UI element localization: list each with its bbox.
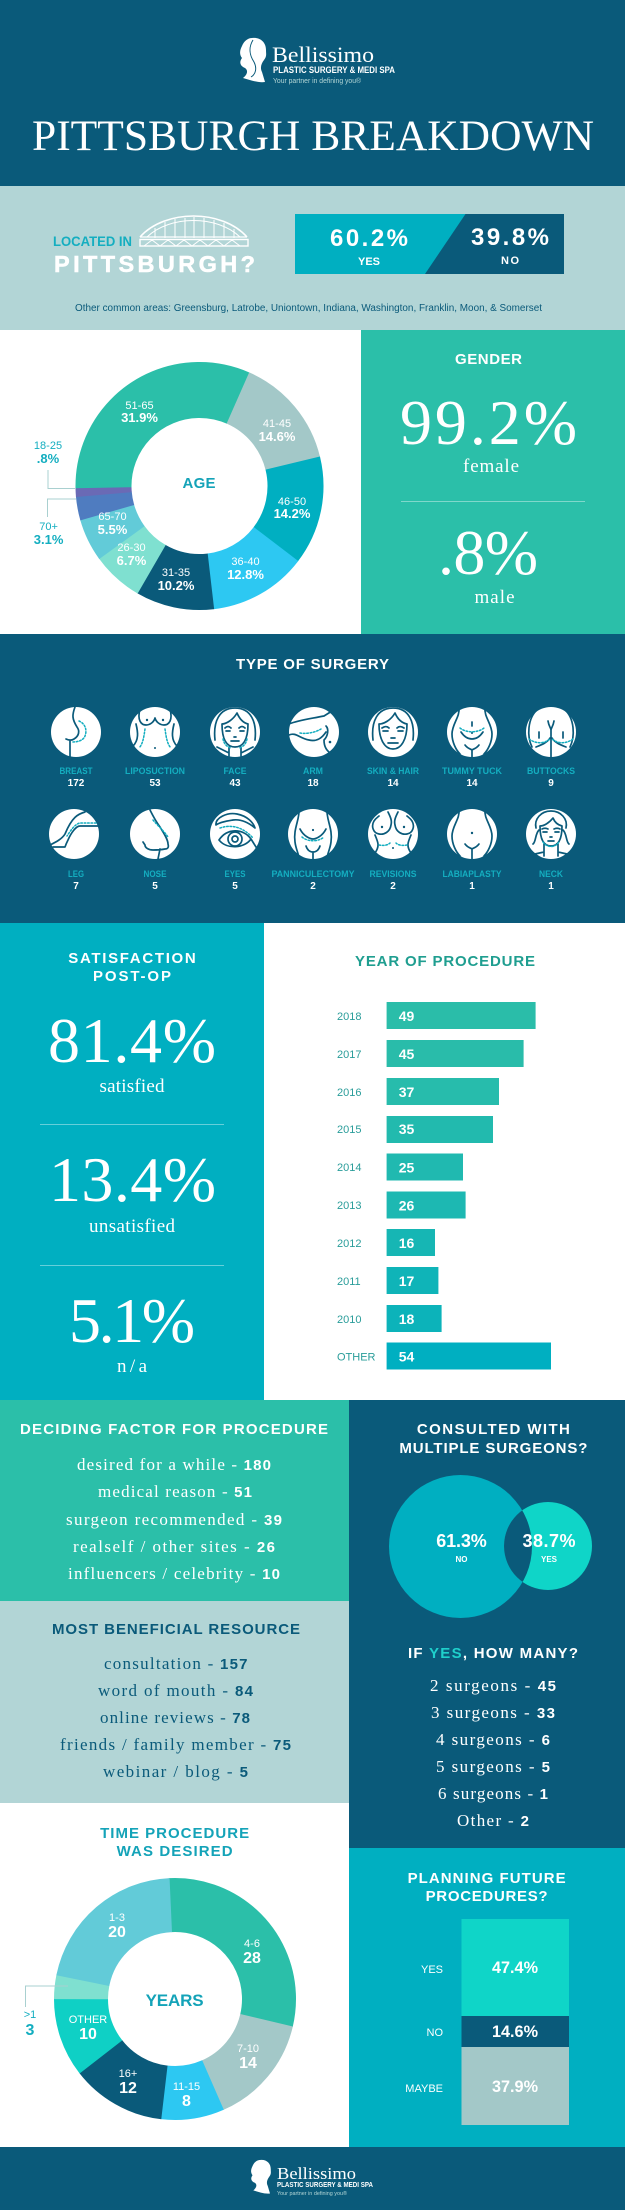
- bar: 2015: 2015: [337, 1124, 361, 1136]
- label: 4-6: [243, 1938, 261, 1967]
- list: surgeon counts: 6 surgeons - 1: [438, 1784, 548, 1803]
- icon: revisions: [368, 809, 418, 859]
- label: neck: [539, 869, 563, 892]
- logo: Bellissimo: Bellissimo: [272, 42, 374, 67]
- label: arm: 18: [307, 778, 319, 789]
- bar: other: 54: [399, 1348, 414, 1364]
- label: 26-30: [117, 542, 147, 568]
- label: 4-6: 28: [243, 1950, 261, 1967]
- bar: 2013: 2013: [337, 1200, 361, 1212]
- list: deciding factors: influencers / celebrity - 10: [68, 1564, 280, 1583]
- panel: age: [0, 330, 361, 634]
- stat: yes: 60.2%: [330, 225, 408, 252]
- bar: 2017: 2017: [337, 1049, 361, 1061]
- bar: 2017: [337, 1040, 524, 1067]
- stat: yes: YES: [358, 256, 380, 268]
- label: other: [69, 2014, 107, 2043]
- bar: 2015: [337, 1116, 493, 1143]
- bar: 2018: 2018: [337, 1011, 361, 1023]
- heading: gender: GENDER: [455, 351, 522, 368]
- bar: 2018: [337, 1002, 536, 1029]
- stat: unsatisfied: unsatisfied: [89, 1216, 176, 1237]
- panel: type of surgery: [0, 634, 625, 923]
- bar chart: years: [337, 1002, 551, 1370]
- panel: header: [0, 0, 625, 186]
- panel: gender: [361, 330, 625, 634]
- logo: Bellissimo: PLASTIC SURGERY & MEDI SPA: [273, 65, 395, 75]
- stacked bar: maybe: MAYBE: [405, 2083, 443, 2095]
- label: 41-45: [259, 418, 296, 444]
- label: labiaplasty: [442, 869, 502, 892]
- label: 18-25: [34, 440, 62, 466]
- stacked bar: yes: YES: [421, 1964, 443, 1976]
- label: eyes: EYES: [224, 869, 246, 880]
- heading: consulted: CONSULTED WITH: [417, 1421, 570, 1438]
- label: 26-30: 26-30: [117, 542, 146, 554]
- label: 7-10: 7-10: [237, 2043, 259, 2055]
- label: leg: LEG: [68, 869, 84, 880]
- bar: 2013: 26: [399, 1198, 414, 1214]
- stat: female: female: [463, 456, 519, 477]
- label: panniculectomy: [272, 869, 355, 892]
- label: leg: 7: [73, 881, 79, 892]
- list: resources: online reviews - 78: [100, 1708, 250, 1727]
- label: revisions: REVISIONS: [370, 869, 416, 880]
- list: resources: friends / family member - 75: [60, 1735, 291, 1754]
- chart: venn: YES: [541, 1555, 558, 1564]
- chart: venn: 61.3%: [436, 1531, 487, 1551]
- label: face: FACE: [224, 766, 246, 777]
- icon: breast: [51, 707, 101, 757]
- label: labiaplasty: LABIAPLASTY: [442, 869, 502, 880]
- label: under 1: [24, 2009, 36, 2039]
- bar: 2010: [337, 1305, 442, 1332]
- chart: venn: NO: [456, 1555, 468, 1564]
- bar: other: [337, 1342, 551, 1370]
- label: revisions: [370, 869, 416, 892]
- label: 4-6: 4-6: [244, 1938, 260, 1950]
- label: 65-70: [98, 511, 128, 537]
- stat: n/a: 5.1%: [69, 1285, 195, 1356]
- label: skin and hair: [367, 766, 419, 789]
- stat: no: 39.8%: [471, 224, 549, 251]
- heading: consulted: MULTIPLE SURGEONS?: [399, 1440, 587, 1457]
- heading: time procedure was desired: [100, 1825, 249, 1860]
- panel: deciding factor: [0, 1400, 349, 1601]
- label: 18-25: .8%: [37, 451, 60, 466]
- bar: 2011: [337, 1267, 438, 1294]
- stat: no: NO: [501, 255, 519, 267]
- bar: 2011: 2011: [337, 1276, 361, 1288]
- label: 65-70: 5.5%: [98, 522, 128, 537]
- label: arm: ARM: [303, 766, 323, 777]
- label: 51-65: 51-65: [125, 400, 154, 412]
- label: 31-35: 31-35: [162, 567, 190, 579]
- label: panniculectomy: 2: [310, 881, 316, 892]
- label: 7-10: [237, 2043, 259, 2072]
- logo: Bellissimo: Your partner in defining you®: [273, 77, 362, 85]
- icon: nose: [130, 809, 180, 859]
- label: 11-15: 8: [182, 2093, 191, 2110]
- list: surgeon counts: Other - 2: [457, 1811, 529, 1830]
- label: breast: BREAST: [60, 766, 93, 777]
- label: 1-3: 20: [108, 1924, 126, 1941]
- stacked bar: yes: [421, 1919, 569, 2016]
- stat: male: .8%: [438, 517, 538, 588]
- stat: n/a: n/a: [117, 1356, 148, 1377]
- label: 11-15: [173, 2081, 200, 2110]
- list: surgeon counts: 3 surgeons - 33: [431, 1703, 555, 1722]
- label: 36-40: 36-40: [231, 556, 260, 568]
- heading: year of procedure: YEAR OF PROCEDURE: [355, 953, 535, 970]
- label: 26-30: 6.7%: [117, 553, 147, 568]
- list: resources: webinar / blog - 5: [103, 1762, 248, 1781]
- label: 16+: 16+: [119, 2068, 137, 2080]
- icon: leg: [49, 809, 99, 859]
- stat: female: 99.2%: [400, 387, 577, 458]
- icon: arm: [289, 707, 339, 757]
- stat: satisfied: satisfied: [100, 1076, 165, 1097]
- label: other: 10: [79, 2026, 97, 2043]
- bar: 2012: 2012: [337, 1238, 361, 1250]
- heading: if yes how many: IF YES, HOW MANY?: [408, 1645, 578, 1662]
- heading: satisfaction post-op: POST-OP: [93, 968, 171, 985]
- bar: 2013: [337, 1192, 466, 1218]
- icon: eyes: [210, 809, 260, 859]
- label: 51-65: 31.9%: [121, 410, 158, 425]
- label: 1-3: 1-3: [109, 1912, 125, 1924]
- label: breast: 172: [68, 778, 85, 789]
- stat: male: male: [474, 587, 514, 608]
- heading: planning future procedures: [408, 1870, 566, 1905]
- heading: planning future procedures: PROCEDURES?: [426, 1888, 548, 1905]
- bar: 2014: [337, 1154, 463, 1180]
- label: nose: 5: [152, 881, 158, 892]
- heading: time procedure was desired: TIME PROCEDURE: [100, 1825, 249, 1842]
- label: tummy tuck: TUMMY TUCK: [442, 766, 502, 777]
- label: 31-35: 10.2%: [158, 578, 195, 593]
- label: 46-50: 46-50: [278, 496, 306, 508]
- label: under 1: 3: [26, 2022, 35, 2039]
- icon: face: [210, 707, 260, 757]
- label: buttocks: BUTTOCKS: [527, 766, 575, 777]
- label: panniculectomy: PANNICULECTOMY: [272, 869, 355, 880]
- logo: footer Bellissimo: Your partner in defining you®: [277, 2190, 347, 2197]
- label: 18-25: 18-25: [34, 440, 62, 452]
- list: deciding factors: medical reason - 51: [98, 1482, 252, 1501]
- label: liposuction: [125, 766, 185, 789]
- bar: 2010: 18: [399, 1311, 414, 1327]
- list: surgeon counts: 2 surgeons - 45: [430, 1676, 556, 1695]
- bar: 2010: 2010: [337, 1314, 361, 1326]
- icon: buttocks: [526, 707, 576, 757]
- label: 70+: [34, 521, 64, 547]
- logo: footer Bellissimo: [251, 2160, 373, 2197]
- chart: venn: 38.7%: [522, 1531, 576, 1551]
- icon: liposuction: [130, 707, 180, 757]
- stacked bar: maybe: 37.9%: [492, 2077, 538, 2096]
- logo: Bellissimo: [240, 38, 395, 85]
- label: 70+: 70+: [39, 521, 58, 533]
- heading: satisfaction post-op: SATISFACTION: [68, 950, 196, 967]
- label: 51-65: [121, 400, 158, 425]
- heading: satisfaction post-op: [68, 950, 196, 985]
- heading: type of surgery: TYPE OF SURGERY: [236, 656, 389, 673]
- list: surgeon counts: 4 surgeons - 6: [436, 1730, 550, 1749]
- bar: 2011: 17: [399, 1273, 414, 1289]
- label: 11-15: 11-15: [173, 2081, 200, 2093]
- label: 41-45: 14.6%: [259, 429, 296, 444]
- icon: labiaplasty: [447, 809, 497, 859]
- label: face: 43: [229, 778, 241, 789]
- list: resources: [60, 1654, 291, 1781]
- label: 16+: [119, 2068, 137, 2097]
- stat: no: [471, 224, 549, 267]
- label: buttocks: 9: [548, 778, 554, 789]
- logo: footer Bellissimo: Bellissimo: [277, 2164, 356, 2183]
- label: tummy tuck: [442, 766, 502, 789]
- icon: panniculectomy: [288, 809, 338, 859]
- label: eyes: [224, 869, 246, 892]
- stacked bar: yes: 47.4%: [492, 1958, 538, 1977]
- icon: tummy tuck: [447, 707, 497, 757]
- list: surgeon counts: 5 surgeons - 5: [436, 1757, 550, 1776]
- bar: 2012: 16: [399, 1235, 414, 1251]
- label: revisions: 2: [390, 881, 396, 892]
- label: 65-70: 65-70: [98, 511, 127, 523]
- label: face: [224, 766, 246, 789]
- logo: footer Bellissimo: PLASTIC SURGERY & MEDI SPA: [277, 2182, 373, 2189]
- label: neck: 1: [548, 881, 554, 892]
- label: leg: [68, 869, 84, 892]
- icon: bridge: [140, 216, 248, 246]
- label: 36-40: [227, 556, 264, 582]
- list: resources: word of mouth - 84: [98, 1681, 254, 1700]
- bar: 2018: 49: [399, 1008, 414, 1024]
- list: deciding factors: surgeon recommended - 39: [66, 1510, 282, 1529]
- label: other: OTHER: [69, 2014, 107, 2026]
- panel: satisfaction post-op: [0, 923, 264, 1400]
- center label: years: YEARS: [146, 1991, 204, 2010]
- title: PITTSBURGH BREAKDOWN: [32, 113, 594, 160]
- center label: age: AGE: [182, 475, 216, 492]
- label: 36-40: 12.8%: [227, 567, 264, 582]
- list: resources: consultation - 157: [104, 1654, 248, 1673]
- stacked bar: no: NO: [426, 2027, 443, 2039]
- heading: planning future procedures: PLANNING FUTURE: [408, 1870, 566, 1887]
- bar: 2015: 35: [399, 1121, 414, 1137]
- bar: yes segment: [295, 214, 466, 274]
- icon: skin and hair: [368, 707, 418, 757]
- panel: year of procedure: [264, 923, 625, 1400]
- label: liposuction: 53: [149, 778, 161, 789]
- chart: years donut: [43, 1867, 307, 2131]
- chart: age donut: [65, 351, 334, 621]
- label: nose: [144, 869, 166, 892]
- heading: consulted: [399, 1421, 587, 1457]
- label: tummy tuck: 14: [466, 778, 478, 789]
- chart: venn: [389, 1475, 592, 1618]
- heading: located in: LOCATED IN: [53, 233, 132, 249]
- label: 41-45: 41-45: [263, 418, 291, 430]
- label: labiaplasty: 1: [469, 881, 475, 892]
- label: under 1: >1: [24, 2009, 36, 2021]
- list: deciding factors: desired for a while - 180: [77, 1455, 271, 1474]
- bar: other: OTHER: [337, 1352, 376, 1364]
- bar: no segment: [425, 214, 564, 274]
- label: eyes: 5: [232, 881, 238, 892]
- bar: 2014: 25: [399, 1160, 414, 1176]
- stat: unsatisfied: 13.4%: [49, 1144, 216, 1215]
- bar: 2014: 2014: [337, 1162, 361, 1174]
- stat: yes: [330, 225, 408, 268]
- panel: most beneficial resource: [0, 1601, 349, 1803]
- bar: 2016: 2016: [337, 1087, 361, 1099]
- stacked bar: maybe: [405, 2047, 569, 2125]
- label: 46-50: 14.2%: [274, 506, 311, 521]
- label: 1-3: [108, 1912, 126, 1941]
- stacked bar: no: 14.6%: [492, 2022, 538, 2041]
- label: buttocks: [527, 766, 575, 789]
- panel: consulted with multiple surgeons: [349, 1400, 625, 1848]
- bar: 2012: [337, 1229, 435, 1256]
- heading: deciding factor: DECIDING FACTOR FOR PROCEDURE: [20, 1421, 328, 1438]
- heading: most beneficial resource: MOST BENEFICIAL RESOURCE: [52, 1621, 300, 1638]
- label: 7-10: 14: [239, 2055, 257, 2072]
- label: arm: [303, 766, 323, 789]
- panel: footer: [0, 2147, 625, 2210]
- bar: 2016: 37: [399, 1084, 414, 1100]
- other common areas: Other common areas: Greensburg, Latrobe, Uniontown, Indiana, Washington, Franklin, Moon, & Somerset: [75, 303, 542, 314]
- label: breast: [60, 766, 93, 789]
- bar: 2017: 45: [399, 1046, 414, 1062]
- list: deciding factors: realself / other sites - 26: [73, 1537, 275, 1556]
- panel: planning future procedures: [349, 1848, 625, 2147]
- panel: time procedure was desired: [0, 1803, 349, 2147]
- label: skin and hair: 14: [387, 778, 399, 789]
- heading: Pittsburgh: PITTSBURGH?: [54, 251, 255, 277]
- label: 70+: 3.1%: [34, 532, 64, 547]
- stat: satisfied: 81.4%: [48, 1005, 216, 1076]
- label: liposuction: LIPOSUCTION: [125, 766, 185, 777]
- heading: time procedure was desired: WAS DESIRED: [117, 1843, 233, 1860]
- label: 31-35: [158, 567, 195, 593]
- icon: neck: [526, 809, 576, 859]
- label: neck: NECK: [539, 869, 563, 880]
- label: 16+: 12: [119, 2080, 137, 2097]
- label: 46-50: [274, 496, 311, 521]
- panel: located in Pittsburgh: [0, 186, 625, 330]
- stacked bar: no: [426, 2016, 569, 2047]
- label: skin and hair: SKIN & HAIR: [367, 766, 419, 777]
- list: deciding factors: [66, 1455, 282, 1583]
- label: nose: NOSE: [144, 869, 166, 880]
- list: surgeon counts: [430, 1676, 556, 1830]
- bar: 2016: [337, 1078, 499, 1105]
